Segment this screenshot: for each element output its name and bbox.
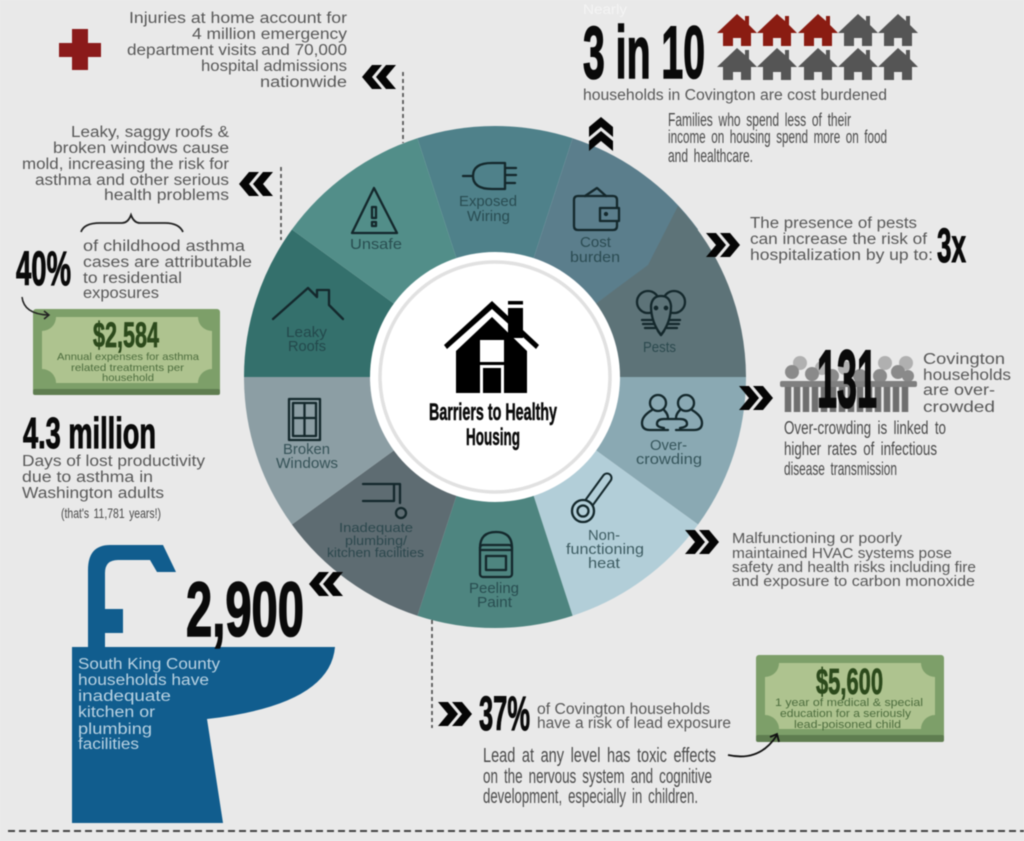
- label: peeling paint: Peeling: [469, 581, 519, 597]
- text: HVAC: maintained HVAC systems pose: [732, 545, 952, 562]
- icon: plug: [463, 163, 516, 189]
- note: years: (that's 11,781 years!): [61, 505, 161, 521]
- money bill: $2,584: related treatments per: [71, 362, 185, 374]
- label: peeling paint: Paint: [477, 595, 512, 611]
- text: injuries at home: nationwide: [260, 74, 347, 91]
- handwritten note: lead toxic: development, especially in children.: [483, 786, 698, 808]
- title: Barriers to Healthy: [429, 399, 557, 426]
- icon: thermometer: [572, 478, 607, 522]
- segment: broken windows: [244, 377, 495, 524]
- donut chart: barriers wheel: [244, 126, 746, 628]
- text: covington over-crowded: Covington: [923, 351, 1005, 368]
- stat: 3 in 10: 3 in 10: [583, 11, 705, 94]
- money bill: $5,600: 1 year of medical & special: [775, 697, 923, 709]
- money bill: $5,600: $5,600: [816, 661, 883, 702]
- arrow: lead to bill: [728, 734, 779, 756]
- arrow: injuries chevrons: [362, 65, 396, 89]
- stat: 37%: 37%: [479, 688, 530, 741]
- money bill: $2,584: [33, 309, 220, 395]
- brace: [81, 215, 183, 232]
- label: inadequate plumbing: Inadequate: [339, 521, 413, 535]
- text: pests risk: can increase the risk of: [750, 231, 928, 248]
- segment: inadequate plumbing: [292, 377, 495, 616]
- icon: warning triangle: [352, 188, 397, 233]
- label: pests: Pests: [643, 340, 676, 356]
- money bill: $2,584: Annual expenses for asthma: [57, 351, 199, 363]
- label: cost burden: burden: [570, 250, 620, 266]
- center disc: [370, 252, 620, 502]
- icon: central house: [444, 301, 539, 393]
- stat: 2,900: 2,900: [186, 567, 304, 653]
- segment: exposed wiring: [417, 126, 573, 377]
- money bill: $2,584: $2,584: [93, 316, 159, 355]
- stat: 4.3 million: 4.3 million: [23, 409, 156, 458]
- text: south king county: facilities: [78, 736, 139, 753]
- text: lead exposure: have a risk of lead exposure: [537, 715, 731, 732]
- text: covington over-crowded: are over-: [923, 382, 995, 399]
- text: childhood asthma: exposures: [83, 285, 159, 302]
- label: broken windows: Broken: [283, 442, 330, 458]
- money bill: $2,584: household: [102, 372, 154, 384]
- text: south king county: plumbing: [78, 721, 152, 738]
- arrow: pests chevrons: [706, 233, 740, 257]
- icon: red cross: [59, 29, 101, 70]
- icon: roof: [273, 288, 343, 319]
- text: lost productivity: Days of lost productivity: [22, 453, 205, 470]
- icon: window: [289, 399, 320, 440]
- segment: non-functioning heat: [495, 377, 698, 616]
- handwritten note: lead toxic: on the nervous system and cognitive: [483, 766, 712, 788]
- segment: over-crowding: [495, 377, 746, 524]
- label: inadequate plumbing: plumbing/: [345, 534, 408, 548]
- text: childhood asthma: of childhood asthma: [83, 238, 245, 255]
- handwritten note: infectious disease: Over-crowding is linked to: [784, 418, 946, 438]
- text: injuries at home: hospital admissions: [201, 58, 347, 75]
- arrow: over-crowding chevrons: [739, 386, 773, 410]
- handwritten note: infectious disease: higher rates of infectious: [784, 439, 937, 459]
- arrow: 40% to bill: [22, 297, 49, 319]
- text: covington over-crowded: crowded: [923, 399, 995, 416]
- text: lead exposure: of Covington households: [537, 701, 710, 718]
- title: Housing: [466, 424, 520, 451]
- label: exposed wiring: Exposed: [459, 194, 517, 210]
- label: unsafe: Unsafe: [350, 237, 402, 253]
- label: leaky roofs: Leaky: [286, 325, 328, 341]
- text: lost productivity: due to asthma in: [22, 469, 153, 486]
- text: injuries at home: department visits and 70,000: [127, 42, 347, 59]
- text: covington over-crowded: households: [923, 367, 1011, 384]
- text: injuries at home: 4 million emergency: [192, 26, 347, 43]
- money bill: $5,600: lead-poisoned child: [794, 719, 901, 731]
- arrow: cost chevrons up: [589, 117, 613, 151]
- text: south king county: households have: [78, 672, 209, 689]
- label: cost burden: Cost: [580, 235, 611, 251]
- text: HVAC: safety and health risks including fire: [732, 559, 976, 576]
- segment: leaky roofs: [244, 230, 495, 377]
- icon: mouse: [637, 291, 685, 335]
- segment: cost burden: [495, 138, 698, 377]
- label: over-crowding: Over-: [650, 438, 687, 454]
- label: non-functioning heat: functioning: [566, 542, 644, 558]
- label: over-crowding: crowding: [636, 452, 702, 468]
- text: lost productivity: Washington adults: [22, 485, 164, 502]
- icon: wallet: [574, 188, 619, 230]
- text: south king county: kitchen or: [78, 704, 155, 721]
- handwritten note: lead toxic: Lead at any level has toxic effects: [483, 745, 716, 767]
- text: HVAC: Malfunctioning or poorly: [732, 530, 903, 547]
- label: exposed wiring: Wiring: [467, 209, 510, 225]
- text: pests risk: hospitalization by up to:: [750, 247, 933, 264]
- handwritten note: infectious disease: disease transmission: [784, 459, 897, 479]
- text: leaky roofs mold: health problems: [104, 187, 229, 204]
- money bill: $5,600: [756, 655, 944, 742]
- note: nearly: Nearly: [583, 1, 627, 17]
- icon array: houses: [717, 14, 918, 80]
- arrow: heat chevrons: [685, 530, 719, 554]
- stat: 40%: 40%: [16, 243, 71, 296]
- icon: people with link: [642, 395, 702, 430]
- label: non-functioning heat: Non-: [588, 528, 620, 544]
- text: leaky roofs mold: broken windows cause: [53, 140, 229, 157]
- money bill: $5,600: education for a seriously: [780, 708, 912, 720]
- handwritten note: families: Families who spend less of their: [668, 110, 851, 130]
- segment: peeling paint: [417, 377, 573, 628]
- arrow: lead chevrons: [438, 702, 472, 726]
- arrow: leaky chevrons: [239, 172, 273, 196]
- text: south king county: South King County: [78, 656, 220, 673]
- label: leaky roofs: Roofs: [288, 339, 326, 355]
- handwritten note: families: and healthcare.: [668, 146, 753, 166]
- text: childhood asthma: to residential: [83, 270, 182, 287]
- stat: 3x: 3x: [937, 220, 966, 273]
- label: broken windows: Windows: [276, 456, 338, 472]
- text: injuries at home: Injuries at home account for: [129, 10, 347, 27]
- text: leaky roofs mold: asthma and other serious: [35, 172, 229, 189]
- text: 131: [817, 334, 877, 425]
- label: non-functioning heat: heat: [588, 556, 620, 572]
- handwritten note: families: income on housing spend more on food: [668, 127, 887, 147]
- text: HVAC: and exposure to carbon monoxide: [732, 573, 975, 590]
- label: inadequate plumbing: kitchen facilities: [327, 546, 424, 560]
- text: childhood asthma: cases are attributable: [83, 254, 252, 271]
- segment: pests: [495, 206, 746, 377]
- icon: crowd: [780, 356, 917, 412]
- text: cost burdened: households in Covington are cost burdened: [583, 87, 887, 104]
- icon: paint can: [480, 532, 512, 577]
- arrow: plumbing chevrons: [309, 572, 343, 596]
- text: leaky roofs mold: Leaky, saggy roofs &: [71, 124, 230, 141]
- text: pests risk: The presence of pests: [750, 215, 917, 232]
- text: south king county: inadequate: [78, 688, 171, 705]
- text: leaky roofs mold: mold, increasing the risk for: [22, 156, 229, 173]
- icon: blue sink: [72, 545, 335, 823]
- segment: unsafe: [292, 138, 495, 377]
- icon: tap and drop: [363, 484, 406, 518]
